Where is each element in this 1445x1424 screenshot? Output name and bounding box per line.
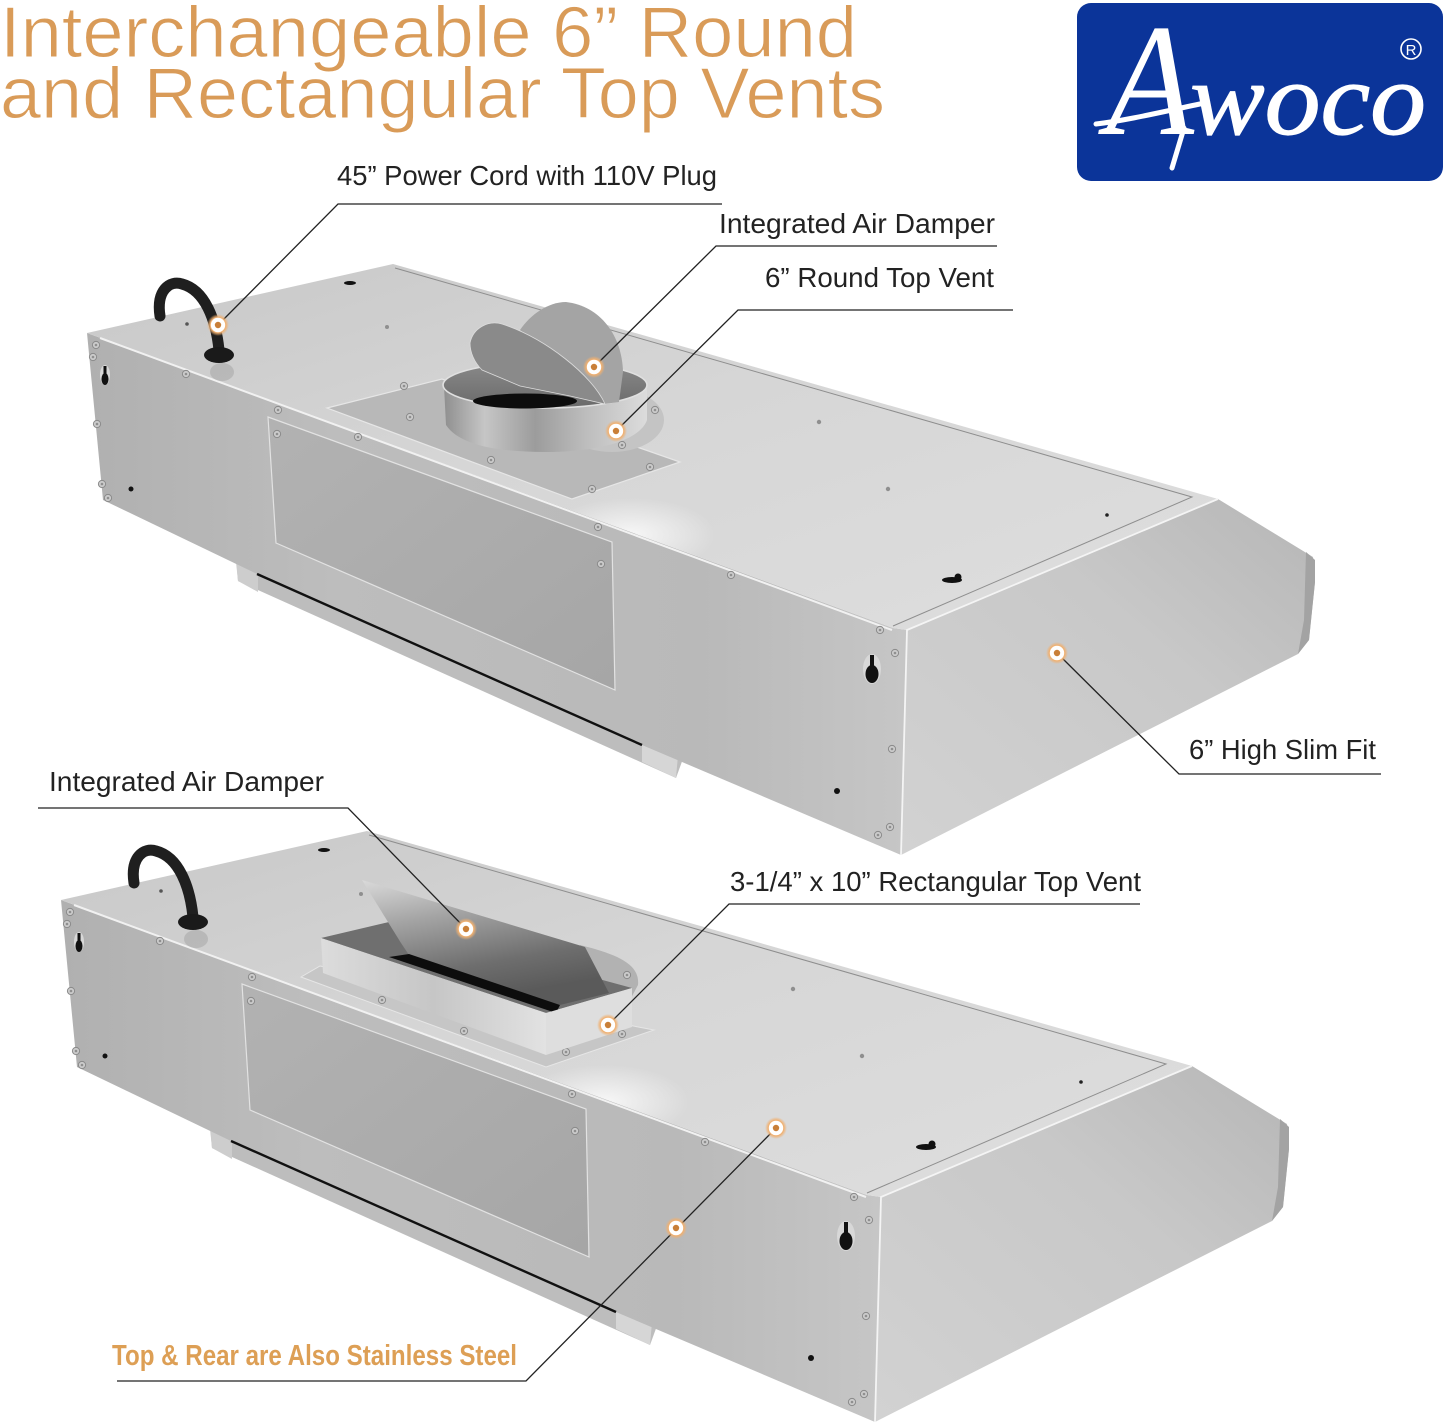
callout: high slim fit: 6” High Slim Fit: [1189, 734, 1376, 765]
round damper flaps: [470, 302, 623, 404]
callout: high slim fit: [1046, 642, 1381, 774]
callout: integrated air damper, upper: [583, 208, 997, 378]
lower range hood with rectangular vent: [61, 831, 1289, 1422]
rectangular vent plate: [301, 945, 654, 1067]
logo: Awoco: [1077, 0, 1443, 181]
title: [0, 0, 885, 134]
callout: integrated air damper, upper: Integrated Air Damper: [719, 208, 995, 239]
upper range hood with round vent: [87, 264, 1315, 855]
callout: top and rear stainless steel: [112, 1117, 787, 1381]
callout: round top vent: 6” Round Top Vent: [765, 262, 994, 293]
callout: round top vent: [605, 262, 1013, 442]
round vent mounting plate: [327, 379, 680, 499]
round duct collar: [443, 362, 647, 452]
callout: rectangular top vent: 3-1/4” x 10” Rectangular Top Vent: [730, 866, 1141, 897]
rectangular damper flap and duct: [321, 880, 632, 1055]
callout: 45 inch power cord: [207, 160, 722, 336]
logo: Awoco: R: [1406, 42, 1417, 59]
title: and Rectangular Top Vents: [0, 54, 885, 134]
callout: rectangular top vent: [597, 866, 1141, 1036]
logo: Awoco: woco: [1190, 42, 1426, 157]
callout: 45 inch power cord: 45” Power Cord with 110V Plug: [337, 160, 717, 191]
callout: integrated air damper, lower: [38, 766, 477, 940]
callout: integrated air damper, lower: Integrated Air Damper: [49, 766, 324, 797]
callout: top and rear stainless steel: Top & Rear are Also Stainless Steel: [112, 1340, 517, 1372]
